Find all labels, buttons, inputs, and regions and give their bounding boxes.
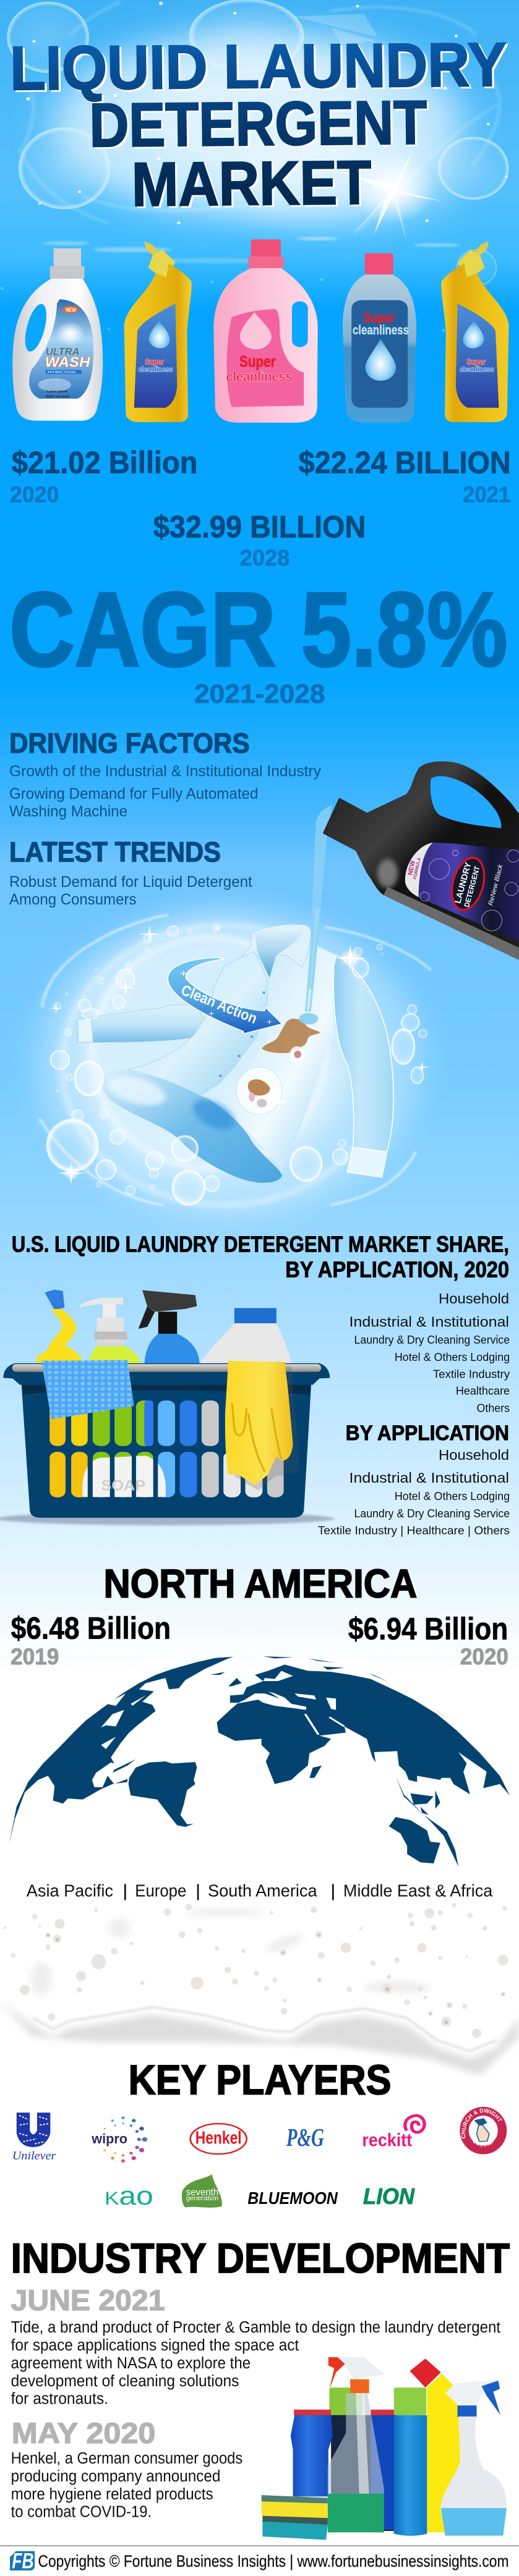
product bottles <box>12 239 508 423</box>
logo: lion: LION <box>363 2185 415 2209</box>
bottle: ultra wash: Lorem ipsum <box>47 390 67 394</box>
development: may 2020: producing company announced <box>11 2467 220 2485</box>
arrow label: Clean Action <box>179 982 259 1027</box>
latest trends: LATEST TRENDS <box>9 836 221 868</box>
label oval: ReNew Black <box>487 863 505 907</box>
north america 2019: 2019 <box>11 1643 59 1669</box>
bottle: yellow left <box>124 242 192 422</box>
footer logo: FB <box>12 2549 34 2574</box>
north america 2019 <box>11 1611 171 1669</box>
yellow glove <box>225 1361 299 1491</box>
value 2020 <box>10 445 197 507</box>
small land masses <box>210 1656 452 1778</box>
white spray bottle <box>440 2381 507 2536</box>
bottle: ultra wash: NEW <box>66 307 77 313</box>
shirt front panel <box>128 952 267 1095</box>
red sea and gulf <box>305 1714 345 1735</box>
value 2028 <box>153 509 366 570</box>
application section <box>0 1232 510 1669</box>
basket body <box>3 1363 330 1518</box>
development: may 2020: Henkel, a German consumer goods <box>11 2449 242 2467</box>
development: june 2021: for astronauts. <box>11 2390 108 2408</box>
application list <box>350 1291 510 1415</box>
bottle: ultra wash: dolor sit amet <box>46 394 70 399</box>
label oval <box>445 853 505 915</box>
title <box>9 30 509 221</box>
application list: Others <box>477 1402 510 1415</box>
logo: seventh generation: generation <box>186 2194 218 2202</box>
soap bar <box>82 1452 166 1498</box>
bottle: pink: Super <box>239 353 276 370</box>
latest trends: Among Consumers <box>9 891 136 908</box>
section heading <box>12 1232 509 1282</box>
label bubbles <box>420 850 519 931</box>
logo: church & dwight lettering: CO., INC. <box>473 2141 494 2147</box>
clean action arrow <box>168 957 282 1033</box>
by application list <box>318 1421 510 1537</box>
basket of cleaning products <box>0 1290 334 1525</box>
latest trends <box>9 836 252 908</box>
development: june 2021: agreement with NASA to explore the <box>11 2354 251 2372</box>
logo: seventh generation: seventh <box>186 2186 218 2198</box>
driving factors: Growing Demand for Fully Automated <box>9 785 258 802</box>
dark bottle <box>329 2387 395 2531</box>
logo: unilever: Unilever <box>12 2150 56 2163</box>
regions list: | <box>195 1881 200 1900</box>
shirt tail <box>101 1070 282 1183</box>
logo: kao: Kao <box>105 2181 153 2210</box>
bottle: yellow right <box>441 242 508 422</box>
bottle: ultra wash <box>12 248 103 421</box>
title: MARKET <box>133 150 374 221</box>
yellow bottle <box>410 2358 461 2532</box>
development: june 2021: for space applications signed the space act <box>11 2336 299 2354</box>
pump bottle <box>79 1297 140 1363</box>
southeast asia islands <box>395 1776 458 1866</box>
logo: reckitt <box>362 2116 424 2150</box>
bottle highlight <box>377 859 398 888</box>
bottle: yellow right: cleanliness <box>460 365 494 373</box>
cuff <box>347 1148 387 1177</box>
value 2020: 2020 <box>10 483 59 507</box>
pour stream top <box>308 805 332 989</box>
footer logo <box>10 2549 35 2574</box>
logo: henkel <box>191 2124 247 2154</box>
soap bar: SOAP <box>101 1477 145 1494</box>
bottle: blue: cleanliness <box>353 323 409 337</box>
header panel <box>1 0 509 423</box>
regions list <box>27 1881 492 1900</box>
south america <box>129 1761 197 1827</box>
driving factors: DRIVING FACTORS <box>9 727 249 759</box>
white jug <box>200 1308 291 1363</box>
logo: wipro: wipro <box>91 2132 127 2146</box>
world map <box>9 1656 510 1866</box>
development: may 2020: more hygiene related products <box>11 2485 213 2503</box>
development: june 2021 <box>11 2284 500 2408</box>
development: may 2020: MAY 2020 <box>12 2417 155 2449</box>
bottle: pink: cleanliness <box>226 369 292 384</box>
lower section <box>0 1881 519 2163</box>
bottle: blue <box>343 253 416 423</box>
logo: seventh generation <box>182 2174 222 2208</box>
bubbles <box>46 924 430 1206</box>
stains <box>236 1019 320 1114</box>
bottle: yellow left: Super <box>145 358 164 366</box>
development: june 2021: JUNE 2021 <box>11 2284 165 2316</box>
tall blue bottle <box>394 2387 427 2536</box>
clear spray bottle <box>328 2357 385 2532</box>
pour stream <box>299 909 321 1025</box>
central america <box>113 1760 135 1773</box>
north america 2020 <box>348 1611 508 1669</box>
logo: bluemoon: BLUEMOON <box>247 2189 338 2208</box>
bottle underside band <box>384 887 519 960</box>
north america 2020: 2020 <box>460 1643 508 1669</box>
sponges <box>262 2495 328 2540</box>
bottle: ultra wash: ULTRA <box>46 345 79 357</box>
logo: p&g: P&G <box>286 2124 324 2151</box>
bottle: ultra wash: ANTIBACTERIAL <box>48 370 77 375</box>
market size figures <box>9 445 511 908</box>
eurasia and africa <box>217 1664 510 1795</box>
shirt body <box>209 944 337 1173</box>
logo: unilever <box>12 2112 56 2163</box>
north america 2019: $6.48 Billion <box>11 1611 171 1645</box>
shirt illustration <box>37 907 431 1216</box>
north america and greenland <box>9 1657 233 1845</box>
regions list: Europe <box>135 1881 186 1900</box>
development: may 2020: to combat COVID-19. <box>11 2503 152 2521</box>
hudson bay and lakes <box>101 1693 145 1749</box>
application list: Household <box>439 1291 509 1307</box>
regions list: South America <box>208 1881 317 1900</box>
right sleeve <box>333 955 393 1151</box>
basket shadow <box>0 1512 334 1525</box>
driving factors <box>9 727 321 820</box>
label oval: DETERGENT <box>462 865 482 908</box>
sparkle <box>338 149 444 243</box>
logo: wipro <box>91 2117 147 2163</box>
driving factors: Growth of the Industrial & Institutional Industry <box>9 762 321 779</box>
basket slots <box>49 1400 284 1498</box>
spray bottle <box>139 1290 200 1363</box>
label white band: NEW <box>406 859 417 876</box>
north america heading: NORTH AMERICA <box>103 1561 417 1606</box>
bottle: yellow right: Super <box>466 358 486 366</box>
key players heading: KEY PLAYERS <box>129 2056 391 2103</box>
regions list: Asia Pacific <box>27 1881 113 1900</box>
blue cloth <box>41 1360 134 1419</box>
pouring detergent bottle <box>308 761 519 989</box>
left sleeve <box>77 1004 204 1043</box>
australia <box>389 1817 440 1863</box>
bottle: yellow left: cleanliness <box>139 365 173 373</box>
value 2021 <box>299 445 511 507</box>
logo: church & dwight lettering: CHURCH & DWIGHT <box>461 2108 502 2138</box>
bottle: blue: Super <box>364 310 395 326</box>
value 2020: $21.02 Billion <box>12 445 197 480</box>
development: may 2020 <box>11 2417 242 2521</box>
regions list: | <box>330 1881 336 1900</box>
latest trends: Robust Demand for Liquid Detergent <box>9 873 252 890</box>
bottle: ultra wash: WASH <box>45 355 90 370</box>
bottle handle hole <box>431 776 501 828</box>
blue shaker bottle <box>291 2410 333 2496</box>
label oval: LAUNDRY <box>452 861 473 904</box>
logo: church & dwight <box>460 2107 507 2154</box>
value 2028: $32.99 BILLION <box>153 509 366 544</box>
bottle body <box>323 761 519 960</box>
cleaning products <box>262 2357 507 2540</box>
bottle: pink <box>213 239 318 423</box>
footer rule <box>0 2545 519 2546</box>
CAGR: 2021-2028 <box>194 679 325 708</box>
inland seas <box>237 1671 336 1710</box>
by application list: Household <box>439 1447 509 1463</box>
swirl glow <box>37 907 431 1216</box>
shirt <box>77 925 393 1183</box>
background: soap wisps and bubbles <box>1 0 509 332</box>
logo: reckitt: reckitt <box>362 2130 412 2150</box>
value 2028: 2028 <box>240 546 290 570</box>
driving factors: Washing Machine <box>9 802 127 820</box>
label white band: FORMULA <box>412 857 422 880</box>
bottom section <box>0 2174 519 2574</box>
development: june 2021: development of cleaning solutions <box>11 2372 239 2390</box>
collar <box>242 925 311 978</box>
title: MARKET <box>131 148 372 219</box>
label white band <box>405 842 433 897</box>
bottle label <box>405 842 519 941</box>
regions list: | <box>122 1881 128 1900</box>
yellow bottle <box>36 1290 83 1363</box>
foam splash <box>0 1903 519 2075</box>
logo: henkel: Henkel <box>195 2127 242 2148</box>
